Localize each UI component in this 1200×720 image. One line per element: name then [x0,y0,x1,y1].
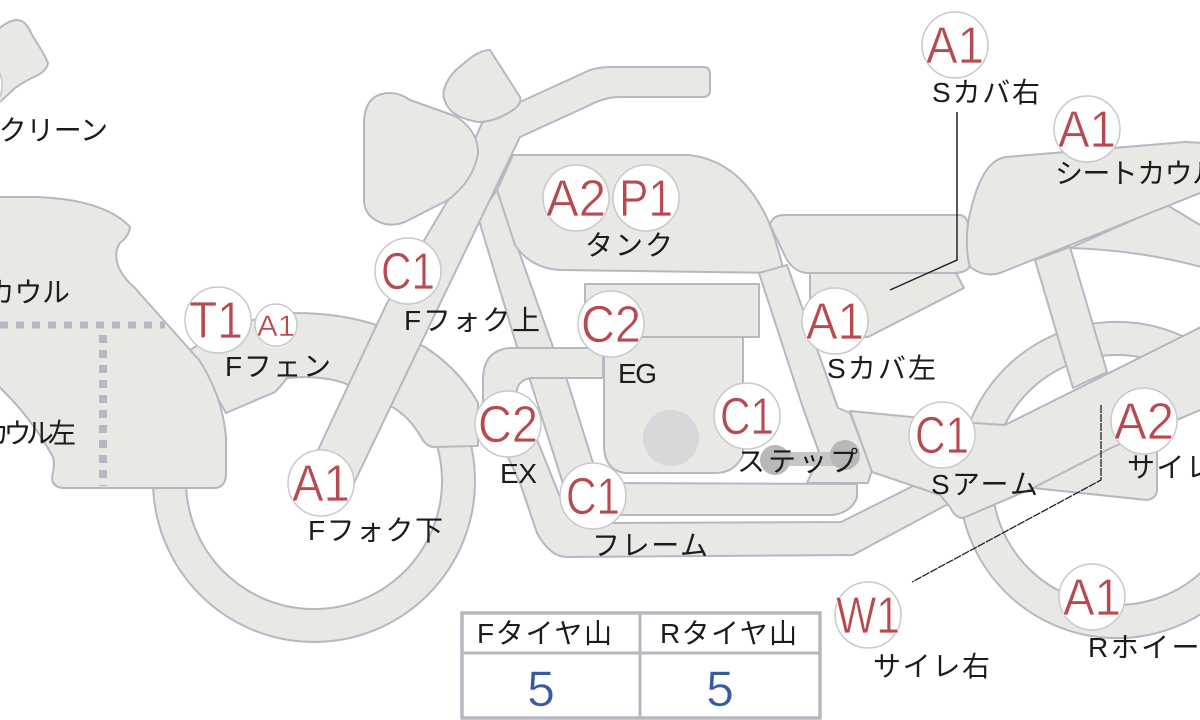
label: S cover left: Sカバ左 [827,353,936,384]
label: frame: フレーム [592,530,708,561]
part: muffler pipe [590,483,857,515]
part: front fender [190,313,478,447]
badge: tank P1: P1 [619,170,673,228]
label: exhaust: EX [500,458,537,489]
badge: screen [0,53,3,117]
table header: rear tire: Rタイヤ山 [660,618,797,649]
badge: seat cowl: A1 [1058,101,1116,159]
part: fork and handlebar [318,67,710,483]
label: fork lower: Fフォク下 [308,515,443,546]
label: S cover right: Sカバ右 [932,77,1040,108]
label: tank: タンク [585,230,673,261]
table header: front tire: Fタイヤ山 [477,618,612,649]
badge: silencer right: W1 [836,587,900,645]
badge: rear wheel: A1 [1063,569,1121,627]
part: rear subframe [1070,205,1200,268]
table value: rear tire: 5 [706,661,734,717]
badge: swing arm: C1 [915,407,969,465]
part: swing arm [850,325,1200,518]
badge: silencer left: A2 [1114,393,1174,451]
badge: fork lower: A1 [292,455,350,513]
badge: tank A2: A2 [546,170,606,228]
part: silencer [1033,430,1157,500]
leader line: silencer right [912,405,1101,582]
badge: engine: C2 [581,296,641,354]
badge: step: C1 [720,388,774,446]
label: fork upper: Fフォク上 [404,305,540,336]
badge: S cover right: A1 [926,17,984,75]
leader line: S cover right [890,112,957,290]
part: rear wheel [959,322,1200,638]
dotted cowl divider [0,325,165,486]
part: fuel tank [497,155,784,273]
part: rear shock [1035,247,1107,388]
badge: frame: C1 [566,468,620,526]
engine round cover [643,410,699,466]
label: engine: EG [618,358,657,389]
part: front wheel [153,320,475,642]
part: side cover left [810,273,964,337]
badge: small A1: A1 [257,310,295,343]
part: rear frame tube [759,265,872,483]
badge: fork upper: C1 [381,243,435,301]
badge: S cover left: A1 [806,293,864,351]
label: step: ステップ [737,446,858,477]
table value: front tire: 5 [527,661,555,717]
part: engine [585,284,759,473]
part: seat [770,215,971,273]
part: meter [444,50,520,122]
tire tread table [462,613,820,718]
part: seat cowl [967,142,1200,275]
label: silencer right: サイレ右 [873,651,990,682]
part: down tube [478,190,600,490]
label: front fender: Fフェン [225,351,331,382]
part: step [760,440,860,475]
label: swing arm: Sアーム [931,469,1038,500]
badge: exhaust: C2 [478,396,538,454]
part: front cowl [0,197,226,488]
part: headlight [364,93,478,225]
part: windscreen [0,20,48,110]
part: exhaust pipe and frame [483,348,950,557]
badge: small A1 [255,304,297,346]
badge: T1: T1 [189,292,243,350]
